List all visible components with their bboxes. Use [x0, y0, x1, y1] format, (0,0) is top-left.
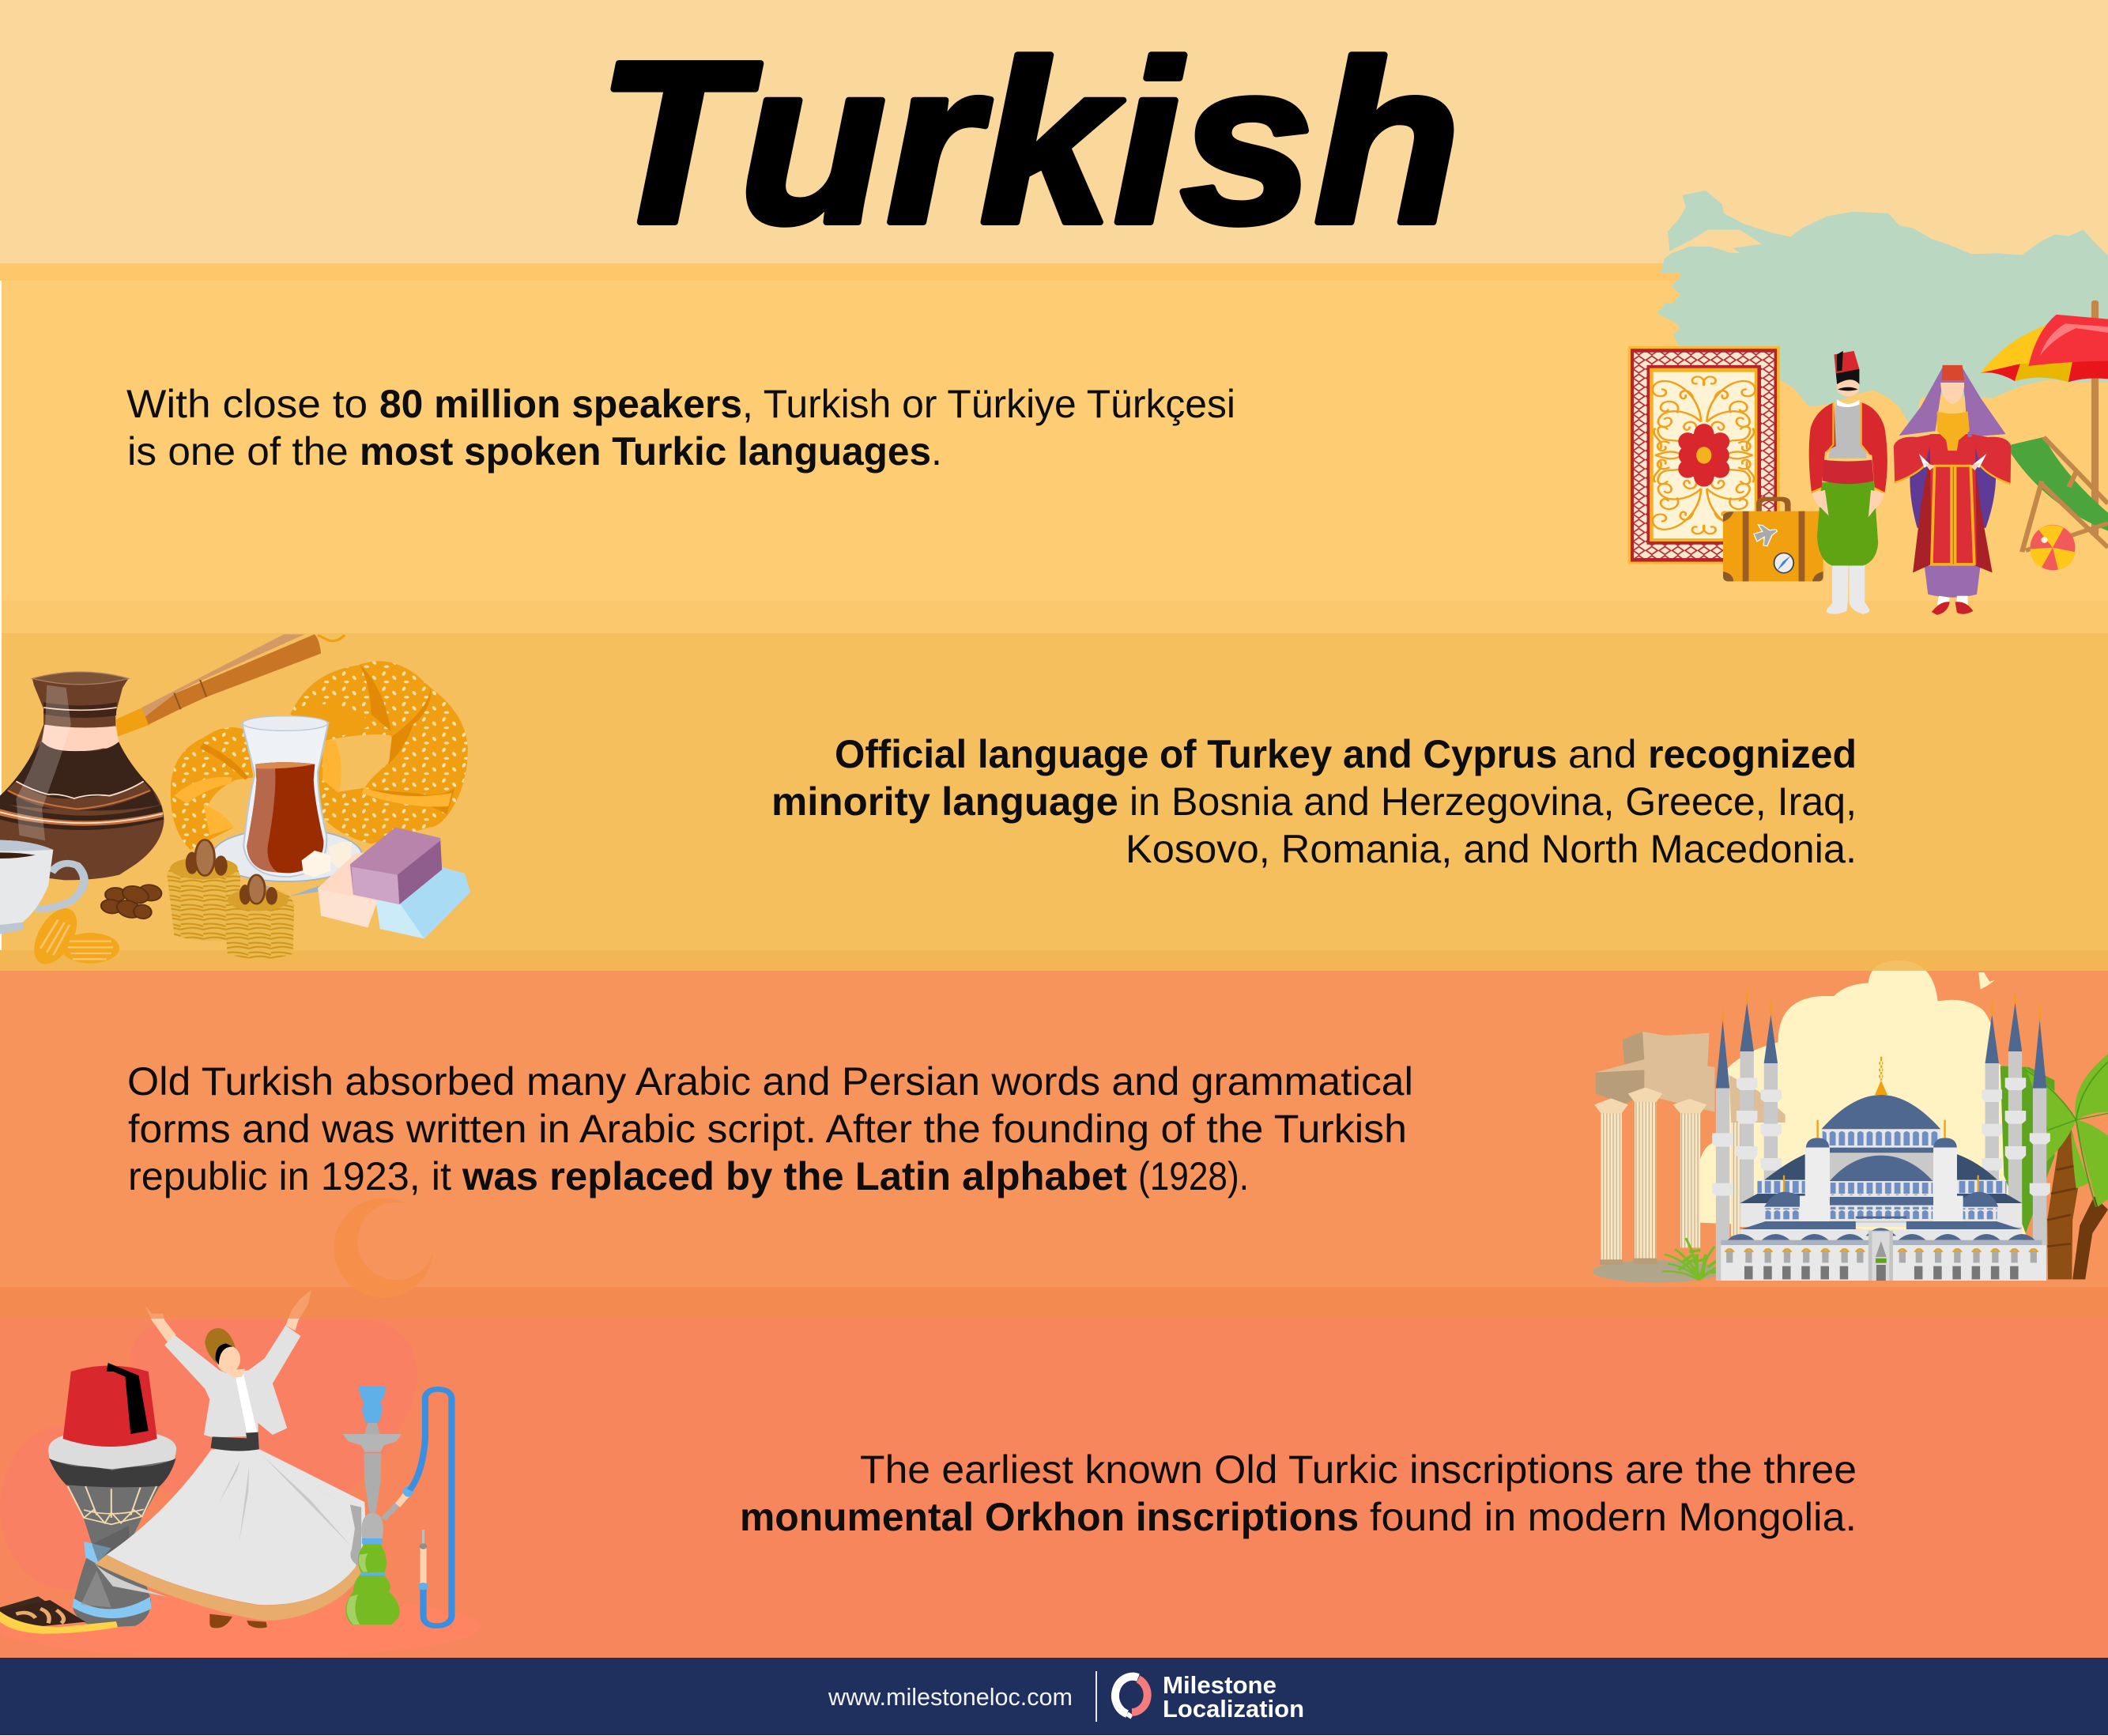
small simit [171, 727, 253, 850]
Milestone Localization wordmark: Milestone [1163, 1671, 1276, 1699]
text block: Orkhon inscriptions: The earliest known Old Turkic inscriptions are the three [860, 1447, 1857, 1492]
carpet flower [1678, 424, 1729, 487]
text block: history of the script [127, 1059, 1413, 1198]
panel 2 strip overlay over cloud top [1818, 951, 2008, 971]
side small domes [1764, 1192, 1998, 1207]
text block: official language: minority language [771, 779, 1129, 824]
text block: official language: in Bosnia and Herzegovina, Greece, Iraq, [1129, 779, 1857, 824]
turkish delight cubes [318, 828, 470, 938]
text block: speakers: With close to [126, 382, 379, 426]
long lower roofs [1741, 1221, 2021, 1229]
text block: speakers: most spoken Turkic languages [360, 429, 931, 474]
coffee cup [0, 840, 84, 934]
text block: Orkhon inscriptions [740, 1447, 1857, 1539]
left minarets [1712, 986, 1782, 1281]
panel 1 background [0, 263, 2108, 633]
main dome finial [1875, 1081, 1887, 1095]
hookah [342, 1386, 413, 1625]
side towers [1806, 1138, 1957, 1148]
beach umbrella [1981, 300, 2108, 536]
large simit [290, 661, 468, 843]
illustration: Turkey map, rug, traditional costumes and beach [1628, 191, 2108, 615]
central portal [1866, 1228, 1896, 1281]
text block: speakers [126, 382, 1235, 474]
footer bar [0, 1658, 2108, 1735]
right minarets [1982, 986, 2050, 1281]
text block: official language [771, 732, 1857, 871]
text block: history of the script: forms and was written in Arabic script. After the founding of the Turkish [128, 1107, 1407, 1151]
Milestone Localization wordmark: Localization [1163, 1695, 1304, 1723]
text block: Orkhon inscriptions: monumental Orkhon inscriptions [740, 1495, 1370, 1539]
ground shadow [0, 1594, 481, 1658]
carpet swirls [1653, 376, 1755, 534]
left white edge [0, 281, 2, 950]
sugar cubes [302, 842, 352, 877]
text block: Orkhon inscriptions: found in modern Mongolia. [1370, 1495, 1857, 1539]
cream cloud [1698, 960, 2026, 1236]
panel 1 upper edge strip [0, 263, 2108, 281]
illustration: Blue Mosque, ruins and palms [1593, 960, 2108, 1282]
footer website: www.milestoneloc.com [828, 1683, 1073, 1711]
panel 3 strip overlay with crescent zone [0, 1287, 332, 1319]
central half dome [1830, 1156, 1933, 1181]
panel 2 lower edge strip [0, 950, 2108, 971]
woman in traditional costume [1894, 365, 2011, 615]
fern [1662, 1238, 1733, 1280]
cezve body [0, 672, 164, 880]
beach ball [2031, 525, 2076, 570]
slippers [0, 1596, 118, 1634]
palm trees [2001, 1054, 2108, 1279]
cookies [25, 904, 119, 969]
man in traditional costume [1809, 351, 1887, 614]
Milestone logo mark [1115, 1674, 1148, 1717]
text block: speakers: is one of the [127, 429, 360, 474]
Milestone Localization wordmark [1163, 1671, 1304, 1723]
arched windows [1726, 1251, 2037, 1262]
baklava pieces [167, 840, 294, 959]
map of Turkey [1657, 191, 2108, 425]
turkish carpet [1628, 346, 1780, 564]
mosque building [1721, 1057, 2046, 1281]
text block: history of the script: Old Turkish absorbed many Arabic and Persian words and grammatical [127, 1059, 1413, 1104]
decorative crescent moon [334, 1198, 433, 1298]
coffee beans [99, 883, 164, 922]
text block: official language: Official language of Turkey and Cyprus [835, 732, 1568, 776]
illustration: whirling dervish, fez, drum and hookah [0, 1290, 481, 1658]
tea saucer [213, 828, 362, 896]
cezve handle [116, 634, 345, 737]
panel 4 background [0, 1319, 2108, 1658]
panel 1 lower edge strip [0, 601, 2108, 633]
illustration: Turkish food and coffee [0, 634, 470, 969]
panel 3 lower edge strip [0, 1287, 2108, 1319]
deck chair [2011, 437, 2108, 552]
footer divider [1095, 1671, 1097, 1722]
row of small domes [1727, 1234, 2035, 1240]
panel 3 background [0, 971, 2108, 1319]
text block: official language: and [1568, 732, 1648, 776]
main dome [1821, 1095, 1940, 1129]
tea glass [242, 716, 329, 877]
flying bird [1978, 972, 1995, 990]
ancient ruin columns [1593, 1032, 1786, 1282]
text block: history of the script: was replaced by the Latin alphabet [462, 1154, 1138, 1198]
hose and mouthpiece [409, 1389, 451, 1626]
soft background blobs [0, 1320, 418, 1589]
text block: history of the script: (1928). [1138, 1154, 1249, 1198]
suitcase [1723, 497, 1823, 581]
whirling dervish [95, 1290, 381, 1628]
text block: history of the script: republic in 1923, it [128, 1154, 462, 1198]
goblet drum [48, 1429, 176, 1628]
red fez [63, 1363, 157, 1447]
panel 2 background [0, 633, 2108, 971]
panel 1 lower strip overlay on food handle [237, 601, 553, 633]
top banner background [0, 0, 2108, 263]
text block: official language: Kosovo, Romania, and North Macedonia. [1126, 827, 1857, 871]
title: Turkish [597, 13, 1461, 271]
text block: speakers: , Turkish or Türkiye Türkçesi [742, 382, 1235, 426]
text block: official language: recognized [1648, 732, 1857, 776]
text block: speakers: . [931, 429, 942, 474]
text block: speakers: 80 million speakers [379, 382, 742, 426]
